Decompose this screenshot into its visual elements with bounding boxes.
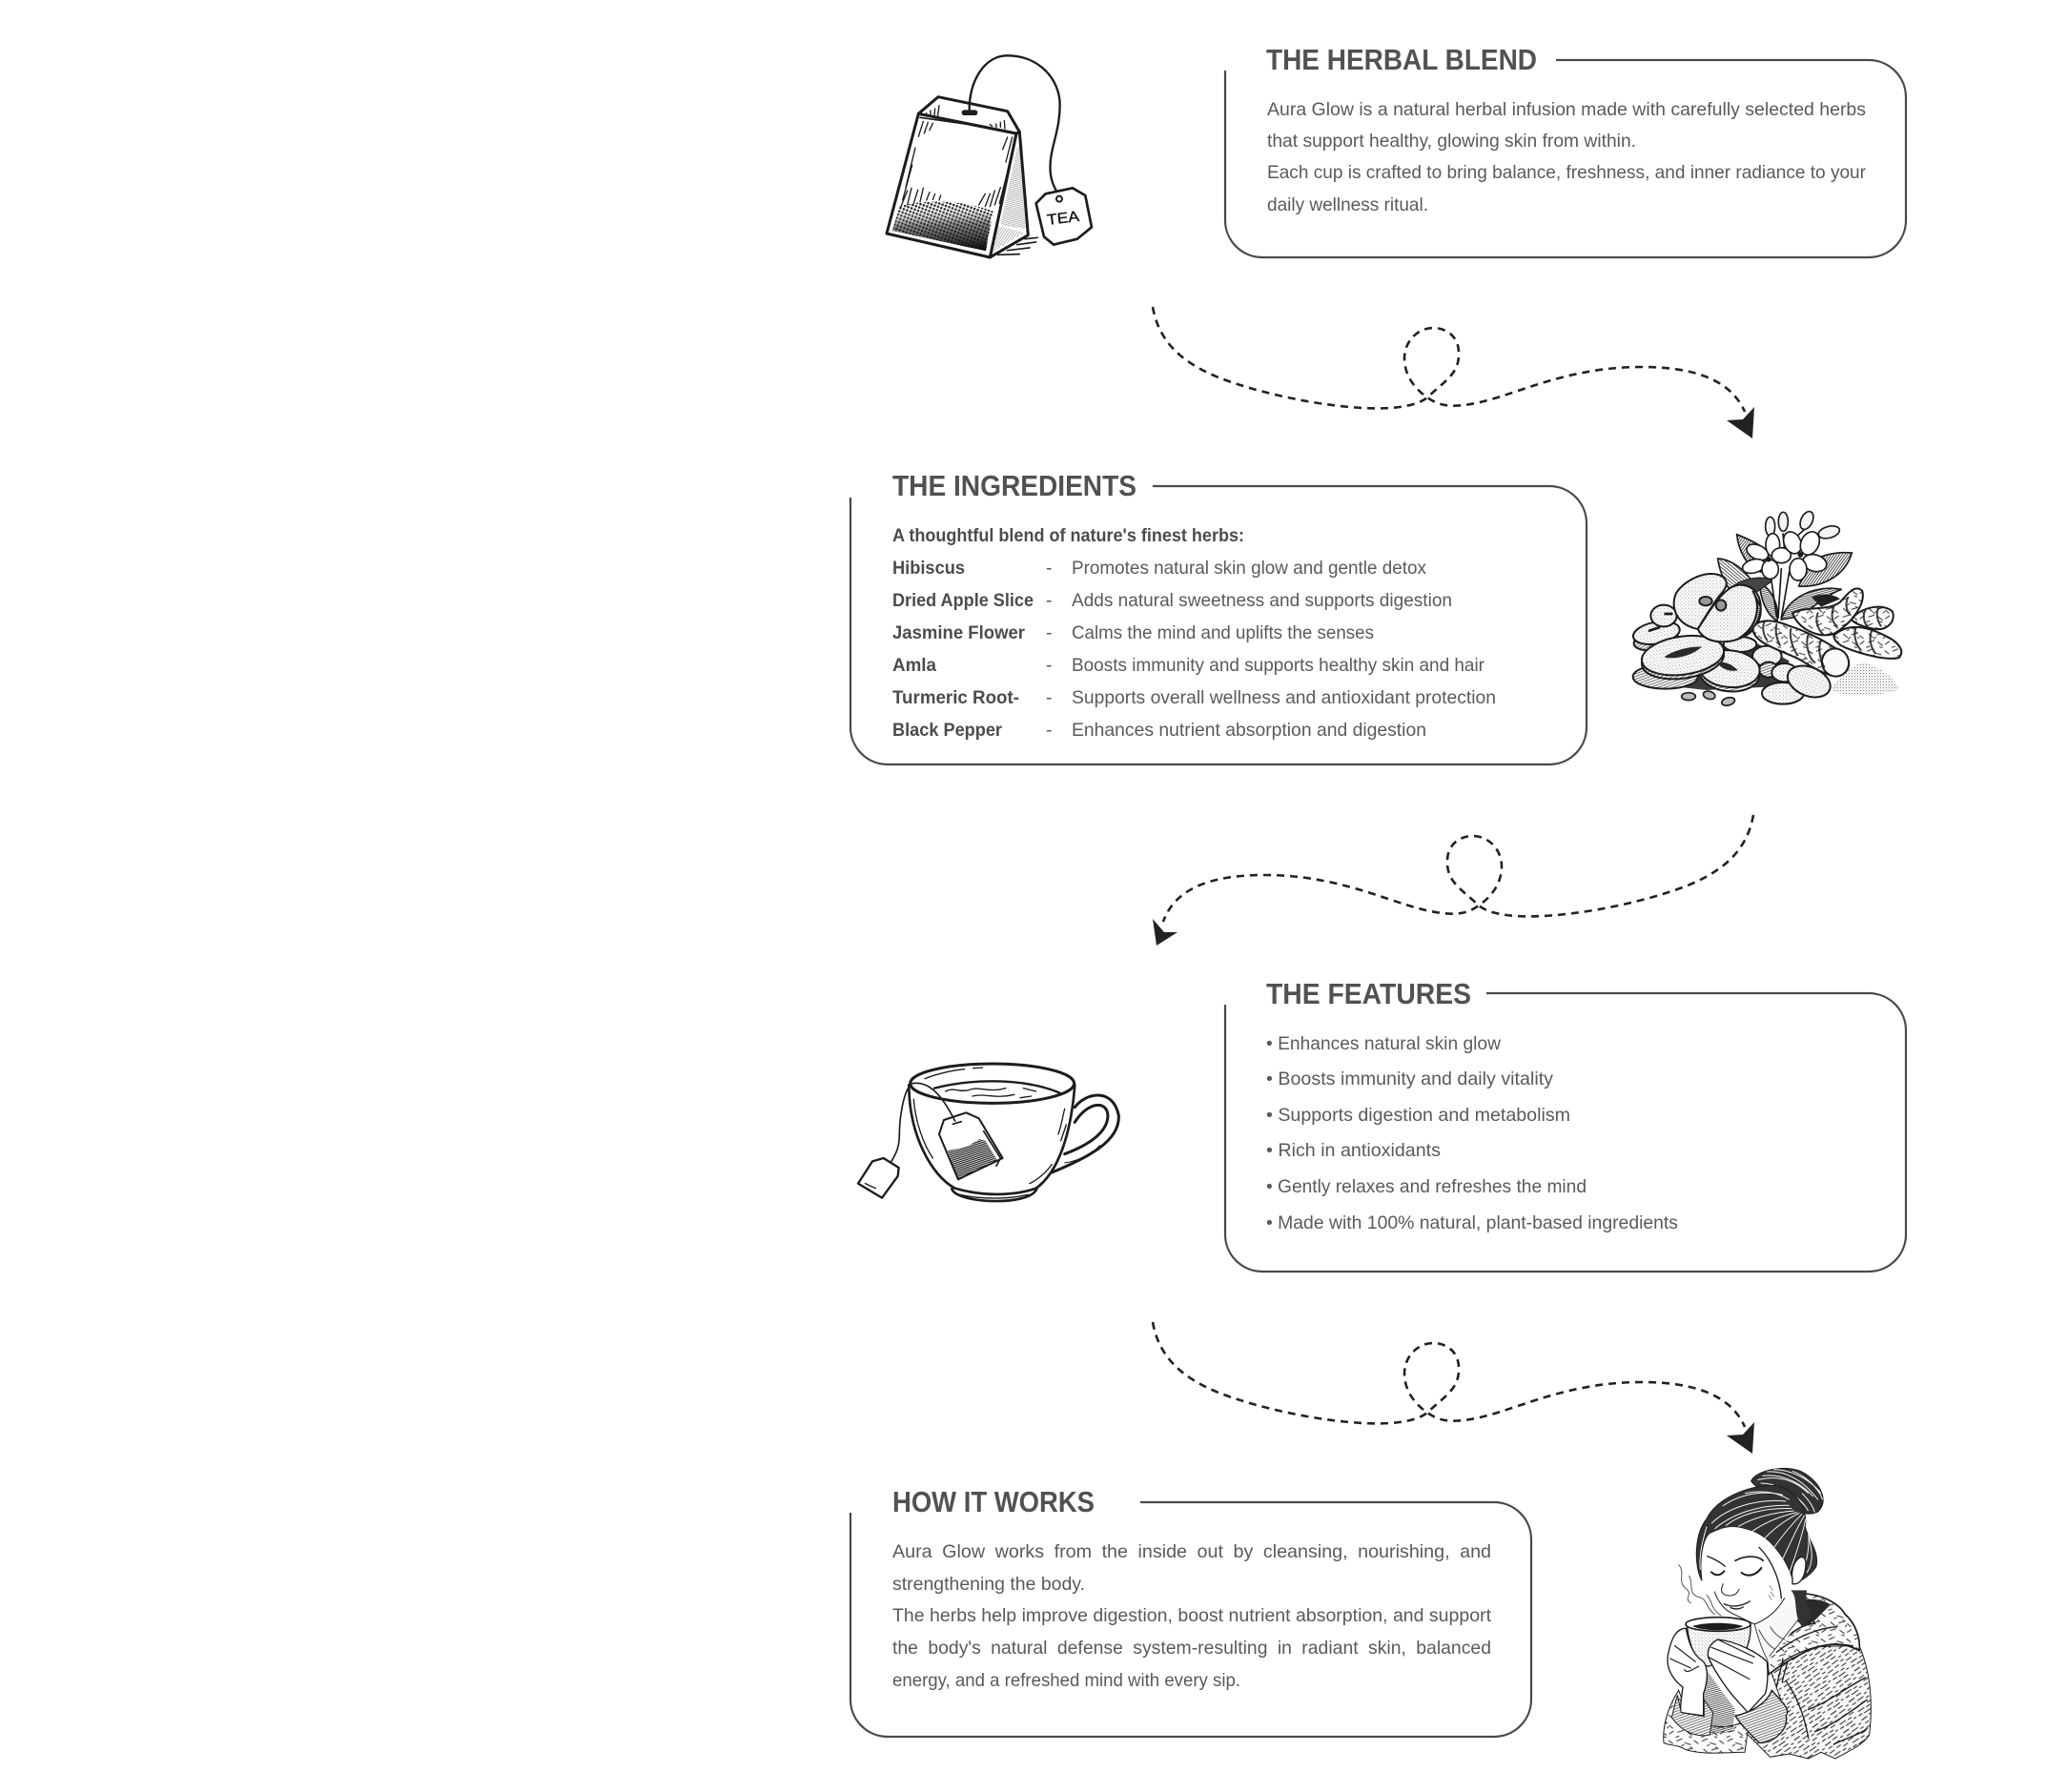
feature list: • Rich in antioxidants: [1266, 1140, 1441, 1161]
staple hole: [962, 110, 977, 115]
right hand: [1708, 1639, 1768, 1713]
cup rim: [911, 1064, 1075, 1103]
ingredient row: hibiscus: [892, 558, 1426, 579]
jasmine buds: [1766, 509, 1841, 540]
body text: Aura Glow works from the inside out by cleansing, nourishing, and: [892, 1541, 1491, 1562]
turmeric roots: [1752, 588, 1901, 681]
hair cap: [1696, 1485, 1817, 1584]
jasmine flowers: [1741, 529, 1829, 580]
arrow: tea bag to ingredients: [1153, 307, 1754, 438]
bag hatching: [901, 106, 1013, 207]
leaves: [1718, 535, 1852, 621]
black pepper seeds: [1682, 690, 1735, 707]
icon: cup with tea bag: [858, 1064, 1118, 1201]
ingredient row: amla: -: [1046, 655, 1053, 676]
tea string: [970, 55, 1060, 197]
ingredient row: dried apple slice: Adds natural sweetness and supports digestion: [1072, 590, 1452, 611]
turmeric powder: [1831, 662, 1899, 696]
left sleeve and sweater: [1664, 1690, 1750, 1753]
ingredient row: turmeric root: Supports overall wellness and antioxidant protection: [1072, 687, 1496, 708]
ingredient row: black pepper: -: [1046, 720, 1053, 741]
hoodie body: [1745, 1646, 1871, 1759]
panel: the herbal blend: [1225, 43, 1906, 257]
feature list: • Enhances natural skin glow: [1266, 1033, 1502, 1054]
ingredient row: turmeric root: [892, 687, 1496, 708]
tea bag side gusset: [990, 132, 1028, 257]
right sleeve cuff: [1735, 1690, 1788, 1742]
ear: [1792, 1558, 1806, 1584]
feature list: • Supports digestion and metabolism: [1266, 1105, 1570, 1126]
body text: strengthening the body.: [892, 1574, 1085, 1595]
ingredient row: jasmine flower: Jasmine Flower: [892, 622, 1025, 643]
ingredient row: turmeric root: Turmeric Root-: [892, 687, 1019, 708]
body text: energy, and a refreshed mind with every sip.: [892, 1670, 1240, 1691]
tea bag front: [887, 113, 1016, 257]
tea cup: [1686, 1618, 1751, 1666]
ingredient row: amla: Amla: [892, 655, 936, 676]
panel outline: [850, 1502, 1531, 1737]
turmeric rings: [1763, 598, 1881, 667]
feature list: • Gently relaxes and refreshes the mind: [1266, 1176, 1587, 1197]
cup saucer base: [952, 1189, 1036, 1201]
hood: [1767, 1594, 1859, 1687]
body text: [892, 1541, 1492, 1691]
ingredient row: jasmine flower: -: [1046, 622, 1053, 643]
body text: daily wellness ritual.: [1267, 194, 1428, 215]
icon: tea bag: [887, 55, 1092, 257]
ingredient row: black pepper: Enhances nutrient absorption and digestion: [1072, 720, 1426, 741]
tea bag shadow: [998, 237, 1037, 255]
apple halves: [1674, 574, 1761, 641]
tea bag strings: [891, 1083, 955, 1161]
body text: Aura Glow is a natural herbal infusion made with carefully selected herbs: [1267, 99, 1866, 120]
stems: [1771, 527, 1819, 618]
ingredient row: turmeric root: -: [1046, 687, 1053, 708]
ingredient row: black pepper: Black Pepper: [892, 720, 1002, 741]
heading: HOW IT WORKS: [892, 1485, 1095, 1518]
hair strands between arms: [1700, 1668, 1735, 1735]
body text: Each cup is crafted to bring balance, freshness, and inner radiance to your: [1267, 162, 1866, 183]
icon: herbs and ingredients pile: [1631, 509, 1901, 707]
feature list: [1266, 1033, 1678, 1233]
ingredient row: black pepper: [892, 720, 1426, 741]
neck: [1754, 1599, 1799, 1661]
body text: that support healthy, glowing skin from within.: [1267, 131, 1636, 152]
ingredient row: hibiscus: Hibiscus: [892, 558, 965, 579]
ingredient row: dried apple slice: -: [1046, 590, 1053, 611]
tea surface ripples: [946, 1089, 1036, 1098]
left cuff: [1671, 1695, 1713, 1736]
tea tag: TEA: [1046, 209, 1081, 229]
tea tag: [1036, 188, 1092, 245]
ingredient row: dried apple slice: Dried Apple Slice: [892, 590, 1034, 611]
ingredient row: jasmine flower: Calms the mind and uplifts the senses: [1072, 622, 1374, 643]
hair behind: [1791, 1590, 1812, 1627]
icon: woman sipping tea: [1664, 1468, 1871, 1759]
heading: THE INGREDIENTS: [892, 469, 1136, 502]
left hand: [1668, 1628, 1707, 1716]
dried apple slices: [1631, 605, 1835, 704]
ingredient row: dried apple slice: [892, 590, 1452, 611]
intro line: A thoughtful blend of nature's finest herbs:: [892, 525, 1244, 546]
ingredient row: amla: Boosts immunity and supports healthy skin and hair: [1072, 655, 1484, 676]
heading: THE FEATURES: [1266, 977, 1471, 1010]
ingredient row: hibiscus: Promotes natural skin glow and gentle detox: [1072, 558, 1426, 579]
ingredient row: jasmine flower: [892, 622, 1374, 643]
heading: THE HERBAL BLEND: [1266, 43, 1537, 76]
hair bun: [1751, 1468, 1823, 1514]
panel: the ingredients: [850, 469, 1587, 764]
body text: [1267, 99, 1866, 215]
pile shadow: [1642, 641, 1790, 690]
arrow: ingredients to features: [1153, 815, 1753, 946]
submerged tea bag: [939, 1112, 1003, 1179]
cup body: [909, 1085, 1075, 1194]
body text: The herbs help improve digestion, boost nutrient absorption, and support: [892, 1605, 1492, 1626]
feature list: • Made with 100% natural, plant-based ingredients: [1266, 1212, 1678, 1233]
ingredient row: hibiscus: -: [1046, 558, 1053, 579]
arrow: features to how it works: [1153, 1322, 1754, 1454]
feature list: • Boosts immunity and daily vitality: [1266, 1069, 1553, 1089]
outer tea tag: [858, 1158, 899, 1198]
ingredient row: amla: [892, 655, 1484, 676]
panel outline: [1225, 993, 1906, 1272]
panel outline: [1225, 60, 1906, 257]
steam: [1679, 1565, 1721, 1616]
panel outline: [850, 486, 1587, 764]
panel: how it works: [850, 1485, 1531, 1737]
tea leaves fill: [892, 201, 993, 251]
face: [1708, 1527, 1790, 1624]
panel: the features: [1225, 977, 1906, 1272]
cup handle: [1052, 1095, 1118, 1172]
body text: the body's natural defense system-resulting in radiant skin, balanced: [892, 1638, 1491, 1659]
